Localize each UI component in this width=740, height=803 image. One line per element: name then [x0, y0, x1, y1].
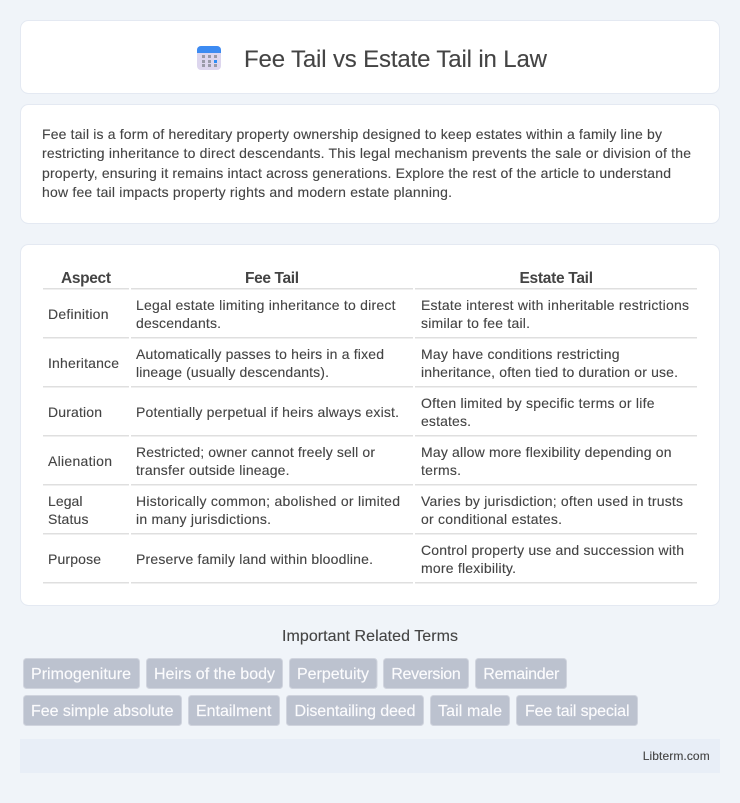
table header row: [61, 270, 593, 287]
chip: Perpetuity: [290, 658, 377, 688]
intro paragraph: [42, 126, 691, 200]
row: alienation: May allow more flexibility depending on: [421, 444, 672, 460]
footer band: [20, 739, 720, 773]
row: purpose: [48, 542, 684, 576]
chip: Disentailing deed: Disentailing deed: [294, 703, 416, 720]
row: inheritance: inheritance, often tied to duration or use.: [421, 364, 678, 380]
row: alienation: transfer outside lineage.: [136, 462, 290, 478]
row: inheritance: [48, 346, 678, 380]
row: inheritance: Automatically passes to heirs in a fixed: [136, 346, 384, 362]
icon: calendar: [197, 46, 221, 70]
row: duration: Potentially perpetual if heirs always exist.: [136, 404, 399, 420]
row: definition: [48, 297, 689, 331]
chip: Primogeniture: Primogeniture: [31, 666, 131, 683]
row: alienation: Alienation: [48, 453, 112, 469]
chip: Entailment: [188, 696, 280, 726]
row: duration: Duration: [48, 404, 102, 420]
row: legal status: [48, 493, 683, 527]
panel: introduction: [20, 104, 720, 224]
related terms heading: Important Related Terms: [282, 628, 458, 645]
row: alienation: [48, 444, 672, 478]
chip: Tail male: Tail male: [438, 703, 502, 720]
chip: Remainder: Remainder: [483, 666, 560, 683]
intro paragraph: how fee tail impacts property rights and modern estate planning.: [42, 184, 452, 200]
row: legal status: or conditional estates.: [421, 511, 562, 527]
row: inheritance: May have conditions restricting: [421, 346, 620, 362]
row: legal status: Status: [48, 511, 88, 527]
table header row: Aspect: [61, 270, 111, 287]
chip: Reversion: Reversion: [391, 666, 461, 683]
intro paragraph: restricting inheritance to direct descendants. This legal mechanism prevents the sale or division of the: [42, 145, 691, 161]
table row lines: [43, 288, 697, 584]
chip: Reversion: [384, 658, 468, 688]
chip: Heirs of the body: Heirs of the body: [154, 666, 275, 683]
table header row: Estate Tail: [520, 270, 593, 287]
chip: Fee simple absolute: Fee simple absolute: [31, 703, 174, 720]
chip: Disentailing deed: [286, 696, 424, 726]
intro paragraph: property, ensuring it remains intact across generations. Explore the rest of the article to understand: [42, 165, 671, 181]
chip: Fee tail special: [516, 696, 638, 726]
row: purpose: Control property use and succession with: [421, 542, 684, 558]
row: purpose: Preserve family land within bloodline.: [136, 551, 373, 567]
row: duration: Often limited by specific terms or life: [421, 395, 655, 411]
panel: comparison table: [20, 244, 720, 606]
row: inheritance: Inheritance: [48, 355, 119, 371]
row: definition: descendants.: [136, 315, 221, 331]
row: definition: similar to fee tail.: [421, 315, 530, 331]
header panel: [20, 20, 720, 94]
chip: Heirs of the body: [146, 658, 282, 688]
row: alienation: Restricted; owner cannot freely sell or: [136, 444, 375, 460]
chip: Fee simple absolute: [24, 696, 182, 726]
row: purpose: Purpose: [48, 551, 101, 567]
row: legal status: in many jurisdictions.: [136, 511, 271, 527]
row: inheritance: lineage (usually descendants).: [136, 364, 329, 380]
chip: Fee tail special: Fee tail special: [525, 703, 630, 720]
row: duration: estates.: [421, 413, 471, 429]
chip: Remainder: [476, 658, 566, 688]
footer source: Libterm.com: [643, 749, 710, 763]
row: definition: Legal estate limiting inheritance to direct: [136, 297, 396, 313]
intro paragraph: Fee tail is a form of hereditary property ownership designed to keep estates within a family line by: [42, 126, 662, 142]
row: alienation: terms.: [421, 462, 461, 478]
table header row: Fee Tail: [245, 270, 299, 287]
chip: Primogeniture: [24, 658, 140, 688]
row: definition: Estate interest with inheritable restrictions: [421, 297, 689, 313]
row: duration: [48, 395, 655, 429]
chip: Entailment: Entailment: [196, 703, 272, 720]
row: definition: Definition: [48, 306, 108, 322]
row: legal status: Varies by jurisdiction; often used in trusts: [421, 493, 683, 509]
row: purpose: more flexibility.: [421, 560, 516, 576]
row: legal status: Historically common; abolished or limited: [136, 493, 400, 509]
row: legal status: Legal: [48, 493, 82, 509]
related terms chips: [24, 658, 638, 726]
chip: Tail male: [430, 696, 510, 726]
title: Fee Tail vs Estate Tail in Law: [244, 46, 548, 73]
chip: Perpetuity: Perpetuity: [297, 666, 369, 683]
